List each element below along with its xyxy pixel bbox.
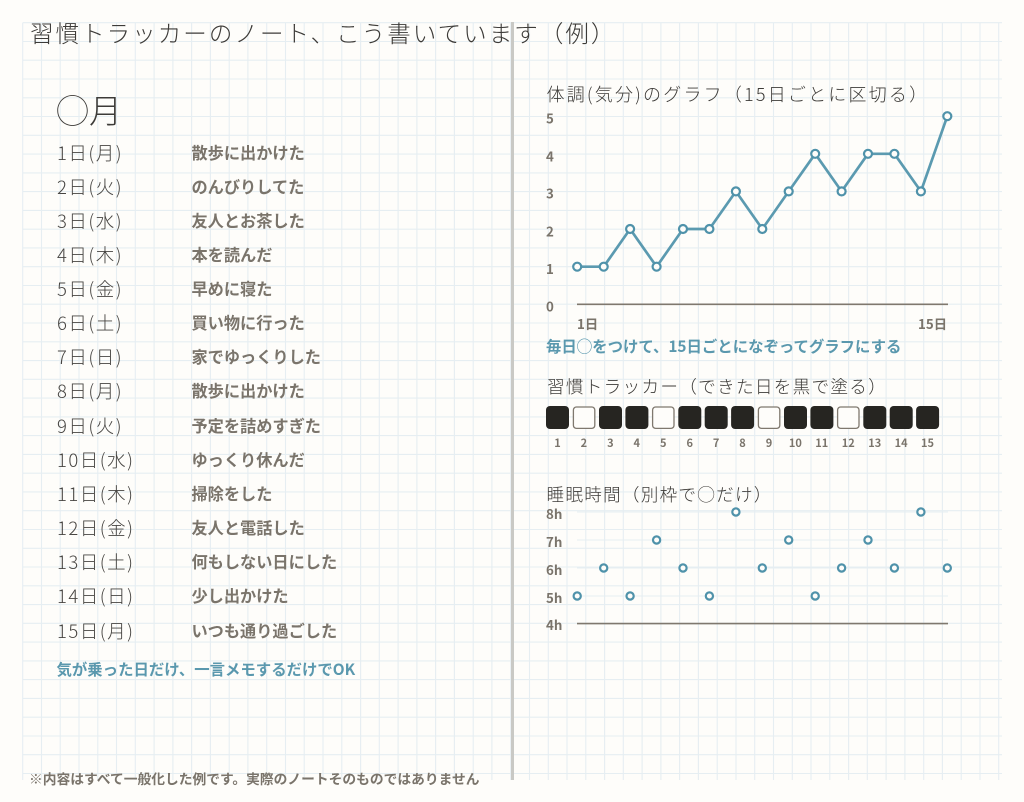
tracker day numbers: 11	[815, 435, 828, 451]
tracker day numbers: 15	[921, 435, 934, 451]
day 13: 何もしない日にした	[192, 549, 337, 573]
day 11: 11日(木)	[57, 481, 134, 507]
graph heading: 体調(気分)のグラフ（15日ごとに区切る）	[546, 81, 929, 107]
sleep heading: 睡眠時間（別枠で◯だけ）	[546, 482, 773, 507]
day 12	[57, 515, 305, 541]
day 9	[57, 413, 321, 439]
day 11	[57, 481, 272, 507]
day 8: 散歩に出かけた	[192, 378, 305, 402]
day 14	[57, 583, 289, 609]
day 7: 家でゆっくりした	[192, 344, 321, 368]
day 7: 7日(日)	[57, 344, 123, 370]
sleep dots	[574, 508, 951, 600]
day 4: 本を読んだ	[192, 242, 272, 266]
tracker squares	[546, 406, 939, 429]
sleep baseline	[577, 623, 948, 625]
footnote: ※内容はすべて一般化した例です。実際のノートそのものではありません	[29, 768, 480, 788]
tracker day numbers: 9	[766, 435, 772, 451]
y axis labels: 3	[546, 184, 554, 202]
sleep axis labels: 5h	[546, 588, 562, 607]
day 4	[57, 242, 272, 268]
tracker day numbers: 12	[842, 435, 855, 451]
tracker day numbers: 5	[660, 435, 666, 451]
sleep axis labels: 6h	[546, 560, 562, 579]
tracker day numbers: 4	[634, 435, 641, 451]
day 13: 13日(土)	[57, 549, 134, 575]
tracker day numbers: 6	[686, 435, 693, 451]
day 9: 予定を詰めすぎた	[192, 413, 321, 437]
tracker day numbers: 7	[713, 435, 719, 451]
day 13	[57, 549, 337, 575]
month heading: ◯月	[56, 85, 122, 133]
day 7	[57, 344, 321, 370]
y axis labels: 5	[546, 108, 554, 128]
day 2	[57, 174, 304, 200]
day 9: 9日(火)	[57, 413, 123, 439]
y axis labels: 2	[546, 222, 554, 240]
y axis labels: 4	[546, 146, 554, 166]
sleep axis labels	[546, 504, 562, 634]
x axis labels	[577, 314, 947, 333]
tracker day numbers: 3	[607, 435, 614, 451]
day 5	[57, 276, 272, 302]
day 3	[57, 208, 305, 234]
tracker day numbers: 2	[581, 435, 587, 451]
y axis labels: 1	[546, 259, 554, 278]
day 4: 4日(木)	[57, 242, 123, 268]
y axis labels: 0	[546, 296, 554, 316]
tracker day numbers	[554, 435, 934, 451]
panel: mood graph	[546, 81, 951, 357]
day 10: 10日(水)	[57, 447, 134, 473]
center divider	[511, 22, 514, 780]
panel: habit tracker	[546, 374, 939, 451]
day 1: 1日(月)	[57, 140, 123, 166]
x axis labels: 15日	[918, 314, 947, 333]
day 12: 友人と電話した	[192, 515, 305, 539]
day 15: 15日(月)	[57, 618, 134, 644]
day 1	[57, 140, 305, 166]
memo note: 気が乗った日だけ、一言メモするだけでOK	[56, 658, 356, 680]
tracker day numbers: 10	[789, 435, 802, 451]
day 10	[57, 447, 305, 473]
sleep gridlines	[577, 512, 948, 596]
sleep axis labels: 4h	[546, 615, 562, 634]
day 3: 3日(水)	[57, 208, 123, 234]
day 6	[57, 310, 305, 336]
panel: daily list	[56, 85, 356, 680]
tracker day numbers: 14	[895, 435, 908, 451]
sleep axis labels: 8h	[546, 504, 562, 523]
day 2: 2日(火)	[57, 174, 123, 200]
day 8: 8日(月)	[57, 378, 123, 404]
day 5: 早めに寝た	[192, 276, 272, 300]
panel: sleep chart	[546, 482, 951, 634]
day 12: 12日(金)	[57, 515, 134, 541]
title: 習慣トラッカーのノート、こう書いています（例）	[30, 15, 616, 49]
day 10: ゆっくり休んだ	[192, 447, 305, 471]
day 5: 5日(金)	[57, 276, 123, 302]
tracker day numbers: 13	[868, 435, 881, 451]
tracker day numbers: 8	[739, 435, 746, 451]
day 2: のんびりしてた	[192, 174, 304, 198]
y axis labels	[546, 108, 554, 316]
day 1: 散歩に出かけた	[192, 140, 305, 164]
day 15	[57, 618, 337, 644]
day 8	[57, 378, 305, 404]
line chart	[573, 112, 951, 271]
sleep axis labels: 7h	[546, 532, 562, 551]
day 3: 友人とお茶した	[192, 208, 305, 232]
baseline	[577, 303, 948, 305]
x axis labels: 1日	[577, 314, 598, 333]
tracker heading: 習慣トラッカー（できた日を黒で塗る）	[547, 374, 887, 399]
day 15: いつも通り過ごした	[192, 618, 337, 642]
day 6: 6日(土)	[57, 310, 123, 336]
tracker day numbers: 1	[554, 435, 561, 451]
day 14: 少し出かけた	[192, 583, 289, 607]
day 11: 掃除をした	[192, 481, 272, 505]
day 6: 買い物に行った	[192, 310, 305, 334]
graph caption: 毎日◯をつけて、15日ごとになぞってグラフにする	[546, 335, 901, 357]
day 14: 14日(日)	[57, 583, 134, 609]
